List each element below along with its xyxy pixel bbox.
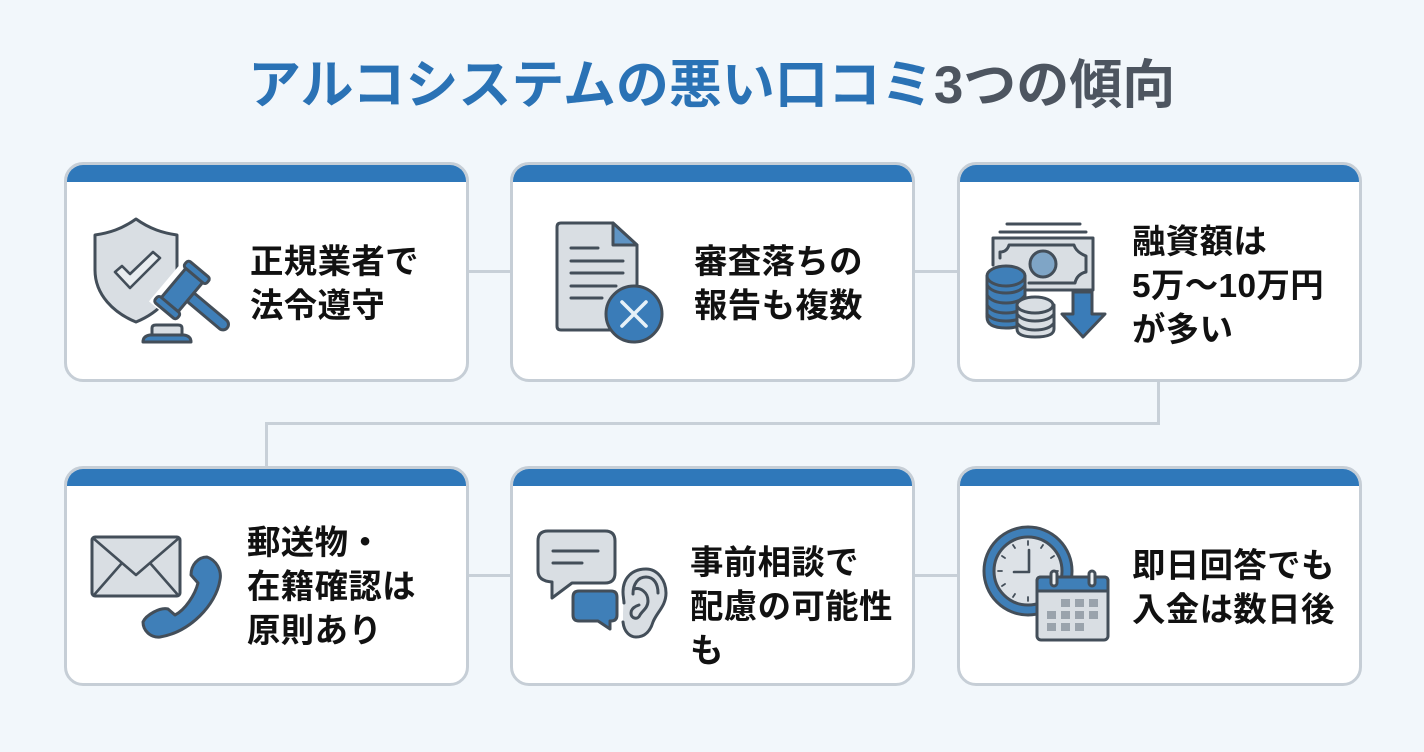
connector: top row card 1 to 2: [468, 270, 511, 273]
text: 正規業者で法令遵守: [250, 244, 419, 325]
text: 即日回答でも入金は数日後: [1132, 548, 1335, 629]
text: 融資額は5万〜10万円が多い: 融資額は: [1132, 224, 1267, 261]
text: 即日回答でも入金は数日後: 即日回答でも: [1132, 548, 1335, 585]
text: 事前相談で配慮の可能性も: 配慮の可能性: [690, 589, 893, 626]
panel: card 4 frame: [64, 466, 469, 686]
text: 即日回答でも入金は数日後: 入金は数日後: [1132, 592, 1335, 629]
panel: card 3 frame: [957, 162, 1362, 382]
panel: card 6 frame: [957, 466, 1362, 686]
text: 審査落ちの報告も複数: [694, 244, 863, 325]
text: 事前相談で配慮の可能性も: [690, 545, 893, 670]
text: 融資額は5万〜10万円が多い: [1132, 224, 1324, 349]
panel: card 1 frame: [64, 162, 469, 382]
connector: top row card 2 to 3: [914, 270, 958, 273]
text: 郵送物・在籍確認は原則あり: 郵送物・: [247, 525, 382, 562]
panel: card 2 frame: [510, 162, 915, 382]
text: 正規業者で法令遵守: 法令遵守: [250, 288, 385, 325]
title: アルコシステムの悪い口コミ3つの傾向: [248, 56, 1175, 115]
text: 融資額は5万〜10万円が多い: が多い: [1132, 312, 1233, 349]
text: 融資額は5万〜10万円が多い: 5万〜10万円: [1132, 268, 1324, 305]
connector: bottom row card 1 to 2: [468, 574, 511, 577]
text: 郵送物・在籍確認は原則あり: 原則あり: [247, 613, 382, 650]
text: 郵送物・在籍確認は原則あり: [247, 525, 416, 650]
text: 審査落ちの報告も複数: 審査落ちの: [694, 244, 863, 281]
text: 事前相談で配慮の可能性も: 事前相談で: [690, 545, 859, 582]
panel: card 5 frame: [510, 466, 915, 686]
connector: bottom row card 2 to 3: [914, 574, 958, 577]
text: 事前相談で配慮の可能性も: も: [690, 633, 724, 670]
connector: top row to bottom row: [265, 382, 1160, 466]
text: 正規業者で法令遵守: 正規業者で: [250, 244, 419, 281]
text: 郵送物・在籍確認は原則あり: 在籍確認は: [247, 569, 416, 606]
text: 審査落ちの報告も複数: 報告も複数: [694, 288, 863, 325]
